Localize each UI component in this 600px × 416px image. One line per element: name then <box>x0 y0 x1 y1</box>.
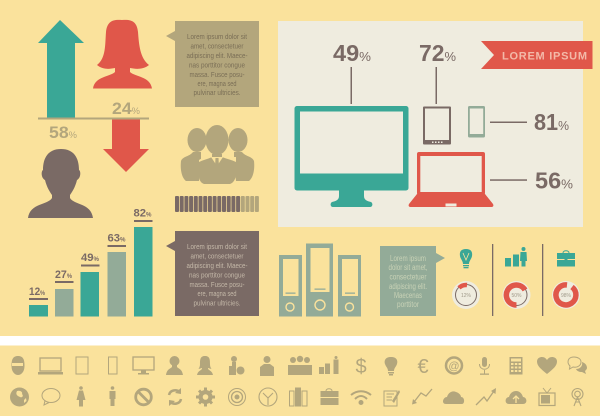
label: phone 81 percent: 81% <box>534 109 569 135</box>
panel: devices <box>278 21 583 227</box>
callout: top text box: nas porttitor congue <box>189 60 245 70</box>
donut: 50 percent: 50% <box>511 293 522 299</box>
icon: woman silhouette <box>93 20 152 89</box>
label: 58 percent: 58% <box>49 123 77 142</box>
icon: dollar sign: $ <box>355 356 367 378</box>
callout: lower text box: Lorem ipsum dolor sit <box>187 242 248 251</box>
ribbon banner <box>481 41 592 69</box>
bar chart: 82% <box>134 208 152 220</box>
callout: sage text box <box>380 246 445 316</box>
callout: top text box: ere, magna sed <box>198 79 236 88</box>
callout: lower text box <box>166 231 259 316</box>
bar chart: 49% <box>81 252 100 264</box>
donut: 98 percent <box>552 281 580 309</box>
donut: 12 percent: 12% <box>461 293 472 299</box>
icon: briefcase <box>557 251 575 266</box>
icon: down arrow <box>103 120 149 172</box>
callout: top text box: pulvinar ultricies. <box>194 88 240 97</box>
donut: 12 percent <box>452 281 480 309</box>
bar chart <box>29 208 152 316</box>
progress bar <box>175 196 259 212</box>
callout: top text box: adipiscing elit. Maece- <box>186 51 248 60</box>
bar chart: 27% <box>55 269 73 281</box>
bar chart: 63% <box>108 232 126 244</box>
donut: 98 percent: 98% <box>561 293 572 299</box>
callout: sage text box: dolor sit amet, <box>388 263 428 272</box>
icon: desktop monitor <box>294 106 408 207</box>
icon: at sign: @ <box>448 360 460 372</box>
callout: lower text box: amet, consectetuer <box>190 252 244 260</box>
label: desktop 49 percent: 49% <box>333 40 371 66</box>
ribbon banner: LOREM IPSUM <box>502 50 587 62</box>
callout: lower text box: pulvinar ultricies. <box>194 298 240 308</box>
icon: smartphone <box>468 106 485 138</box>
callout: lower text box: adipiscing elit. Maece- <box>186 261 248 270</box>
binders <box>279 244 361 316</box>
icon: at sign <box>446 358 462 374</box>
icon: business team <box>181 125 254 184</box>
callout: sage text box: Lorem ipsum <box>390 254 426 263</box>
callout: top text box <box>166 21 259 107</box>
donut: 50 percent <box>502 281 530 309</box>
callout: sage text box: porttitor <box>397 300 419 309</box>
callout: top text box: Lorem ipsum dolor sit <box>187 32 248 41</box>
callout: sage text box: Maecenas <box>394 291 422 300</box>
bar chart: 12% <box>29 286 46 298</box>
icon strip <box>10 356 587 406</box>
callout: top text box: amet, consectetuer <box>190 42 244 50</box>
callout: lower text box: massa. Fusce posu- <box>190 280 245 289</box>
icon: man silhouette <box>28 149 93 218</box>
label: 24 percent: 24% <box>112 99 140 118</box>
callout: lower text box: ere, magna sed <box>198 289 236 298</box>
label: laptop 56 percent: 56% <box>535 168 573 194</box>
icon: tablet <box>423 106 451 144</box>
label: tablet 72 percent: 72% <box>419 40 456 66</box>
icon row 1 <box>12 356 587 378</box>
callout: top text box: massa. Fusce posu- <box>190 70 245 79</box>
callout: lower text box: nas porttitor congue <box>189 270 245 280</box>
icon: laptop <box>409 152 493 207</box>
callout: sage text box: consectetuer <box>390 272 427 282</box>
callout: sage text box: adipiscing elit. <box>389 282 427 291</box>
icon: up arrow <box>38 20 84 118</box>
icon: growth chart with person <box>505 247 527 266</box>
icon: euro sign: € <box>417 356 429 378</box>
icon: light bulb <box>460 249 472 268</box>
icon row 2 <box>10 386 583 406</box>
